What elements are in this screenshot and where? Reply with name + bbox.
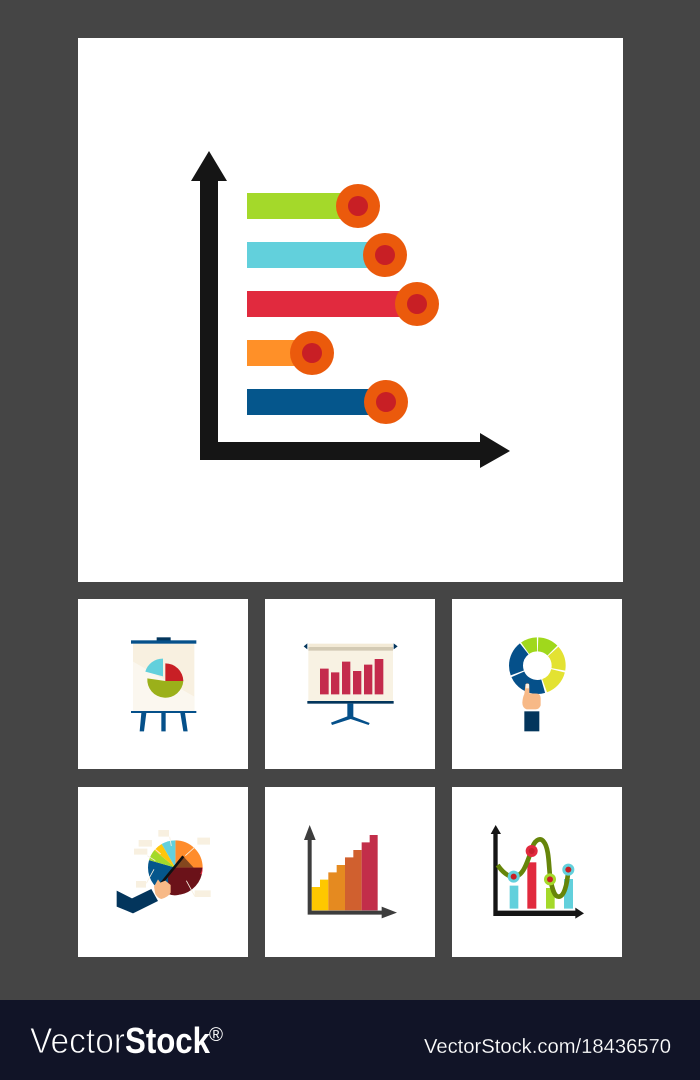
panel: hand with pie chart xyxy=(78,787,248,957)
icon: bars with curve and markers xyxy=(491,825,584,919)
logo: VectorStock: Stock xyxy=(125,1020,211,1061)
logo: VectorStock xyxy=(30,1020,223,1061)
icon: donut chart with hand xyxy=(516,644,559,731)
bar row: red xyxy=(247,282,439,326)
panel: donut with pointing hand xyxy=(452,599,622,769)
icon: rising stepped bars with axes xyxy=(304,825,397,918)
logo: VectorStock: ® xyxy=(209,1025,223,1046)
panel: stepped bar chart xyxy=(265,787,435,957)
footer band xyxy=(0,1000,700,1080)
icon: easel with pie chart xyxy=(131,637,196,731)
panel: flip chart with pie xyxy=(78,599,248,769)
chart axes with arrows xyxy=(191,151,510,468)
panel: bars with trend curve xyxy=(452,787,622,957)
bar row: blue xyxy=(247,380,408,424)
panel: projector screen with bars xyxy=(265,599,435,769)
bar row: cyan xyxy=(247,233,407,277)
bar row: green xyxy=(247,184,380,228)
panel: main horizontal bar chart xyxy=(78,38,623,582)
icon: hand pointing at pie chart xyxy=(117,830,211,913)
icon: projector screen bar chart xyxy=(304,643,398,725)
logo: VectorStock: Vector xyxy=(30,1020,125,1061)
bar row: orange xyxy=(247,331,334,375)
image id text: VectorStock.com/18436570 xyxy=(424,1036,671,1058)
